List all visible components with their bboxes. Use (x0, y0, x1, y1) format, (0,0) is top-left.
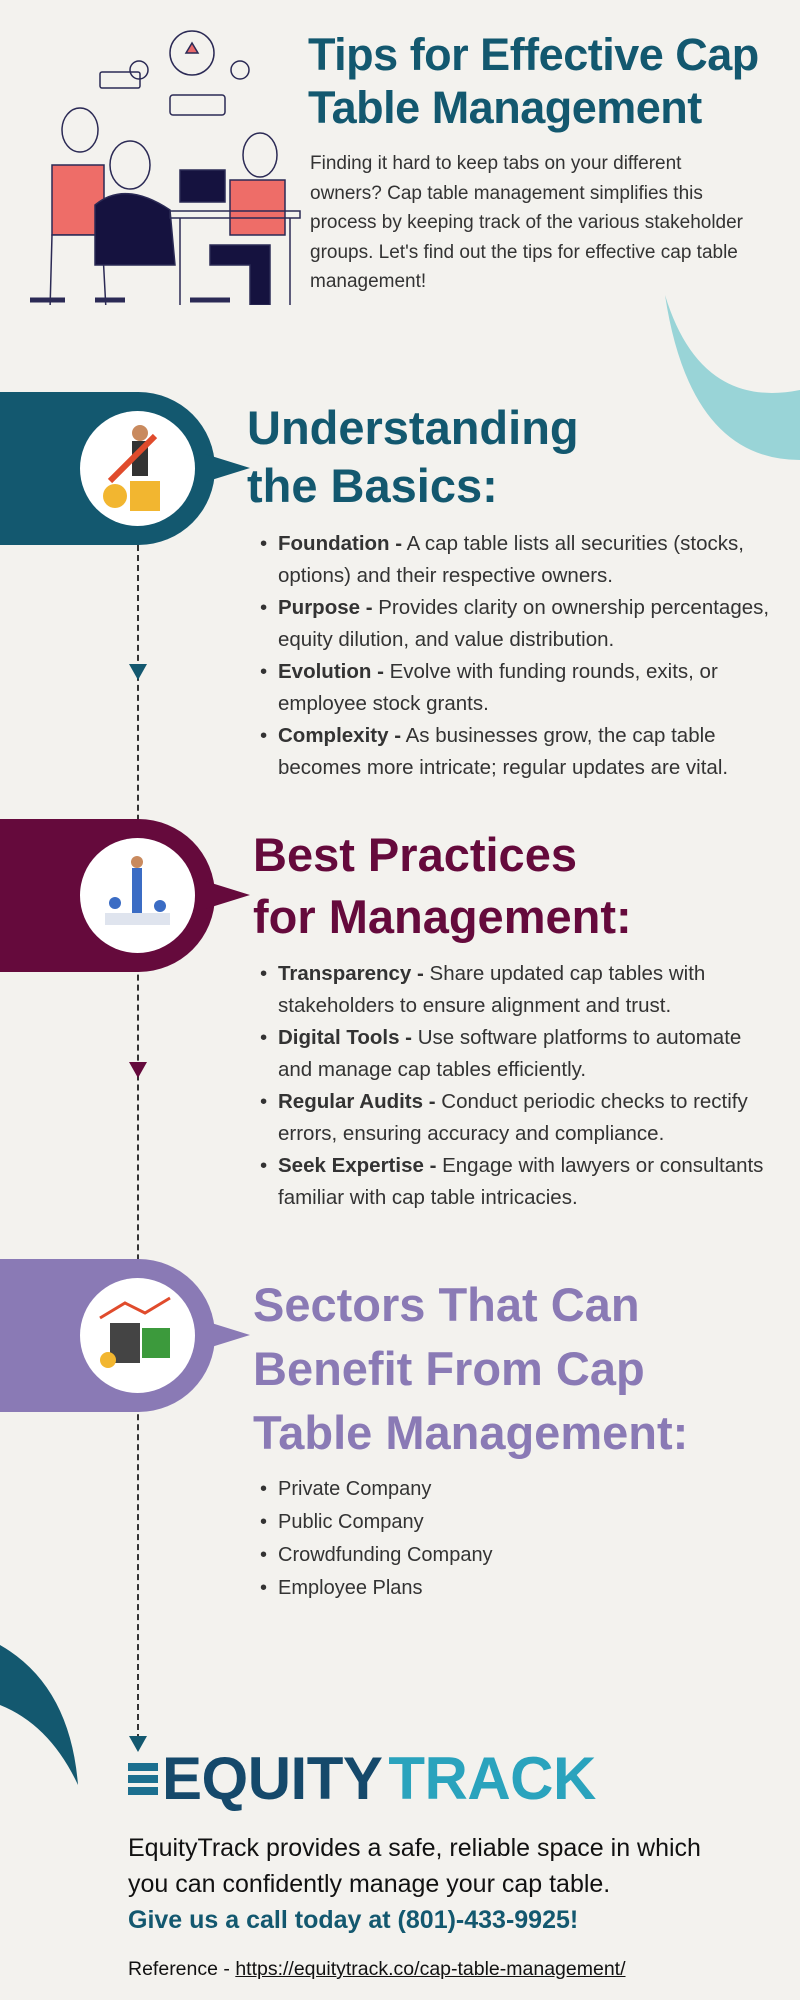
arrow 3 (129, 1736, 147, 1752)
heading: Sectors: Table Management: (253, 1406, 688, 1459)
list section 3 (260, 1478, 493, 1599)
heading: Sectors: Benefit From Cap (253, 1342, 645, 1395)
bullets section 2: Digital Tools - Use software platforms to automate and manage cap tables efficiently. (278, 1026, 741, 1081)
heading: Best Practices (253, 828, 632, 943)
closing text: EquityTrack provides a safe, reliable space in which you can confidently manage your cap table. (128, 1834, 701, 1898)
illustration: people at desk (30, 30, 301, 305)
timeline dashed line (137, 545, 139, 1740)
bullets section 1: Complexity - As businesses grow, the cap table becomes more intricate; regular updates are vital. (278, 724, 728, 779)
list section 3: Employee Plans (278, 1577, 423, 1599)
decorative brush bottom left (0, 1645, 78, 1785)
bullets section 1 (260, 532, 769, 779)
logo: EquityTrack: TRACK (388, 1744, 596, 1812)
bullets section 1: Purpose - Provides clarity on ownership percentages, equity dilution, and value distribution. (278, 596, 769, 651)
icon: team (80, 838, 195, 953)
list section 3: Crowdfunding Company (278, 1544, 493, 1566)
bullets section 2 (260, 962, 763, 1209)
section 1 band (0, 392, 250, 545)
intro text: Finding it hard to keep tabs on your different owners? Cap table management simplifies this process by keeping track of the various stakeholder groups. Let's find out the tips for effective cap table management! (310, 153, 743, 292)
decorative brush top right (665, 296, 800, 460)
heading: Sectors (253, 1278, 688, 1459)
bullets section 2: Regular Audits - Conduct periodic checks to rectify errors, ensuring accuracy and compliance. (278, 1090, 748, 1145)
arrow 2 (129, 1062, 147, 1078)
title: Tips for Effective Cap (308, 29, 759, 80)
section 3 band (0, 1259, 250, 1412)
title: Table Management (308, 82, 702, 133)
reference: Reference - https://equitytrack.co/cap-table-management/ (128, 1958, 626, 1980)
arrow 1 (129, 664, 147, 680)
heading: Sectors: Sectors That Can (253, 1278, 640, 1331)
bullets section 1: Foundation - A cap table lists all securities (stocks, options) and their respective owners. (278, 532, 744, 587)
bullets section 2: Seek Expertise - Engage with lawyers or consultants familiar with cap table intricacies. (278, 1154, 763, 1209)
closing text: Give us a call today at (801)-433-9925! (128, 1906, 578, 1934)
icon: calculator and money (80, 1278, 195, 1393)
heading: Best Practices: for Management: (253, 890, 632, 943)
closing text (128, 1834, 701, 1934)
heading: Understanding the Basics: Understanding (247, 401, 579, 454)
heading: Best Practices: Best Practices (253, 828, 577, 881)
bullets section 1: Evolution - Evolve with funding rounds, exits, or employee stock grants. (278, 660, 718, 715)
heading: Understanding the Basics (247, 401, 579, 512)
list section 3: Public Company (278, 1511, 424, 1533)
list section 3: Private Company (278, 1478, 431, 1500)
logo: EquityTrack: EQUITY (162, 1744, 382, 1812)
title (308, 29, 759, 133)
icon: businessman on coins (80, 411, 195, 526)
section 2 band (0, 819, 250, 972)
heading: Understanding the Basics: the Basics: (247, 459, 498, 512)
bullets section 2: Transparency - Share updated cap tables with stakeholders to ensure alignment and trust. (278, 962, 705, 1017)
logo: EquityTrack (128, 1744, 596, 1812)
